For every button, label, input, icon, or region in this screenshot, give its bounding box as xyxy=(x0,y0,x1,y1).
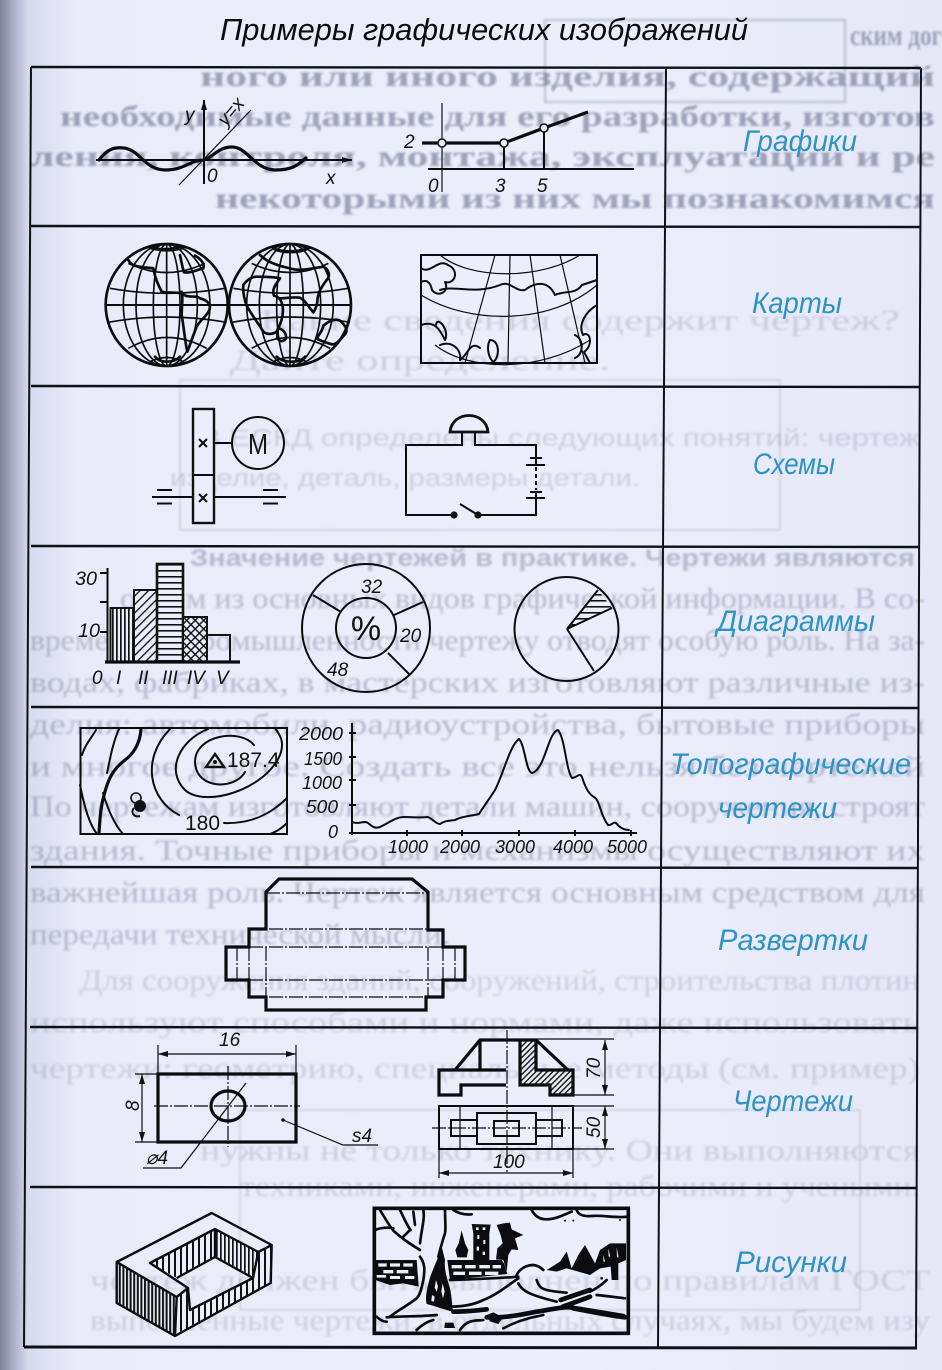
pie chart xyxy=(514,577,618,681)
piecewise line graph: 2 xyxy=(403,132,415,153)
faint show-through text from the reverse page: здания. Точные приборы и механизмы осуществляют их xyxy=(30,834,925,867)
bar chart: 10 xyxy=(78,621,100,642)
line chart: 1000 xyxy=(388,837,428,857)
bar chart xyxy=(75,564,240,689)
bar chart: I xyxy=(116,668,122,689)
sine and line graph: 0 xyxy=(207,166,218,187)
row 5: topographic drawings xyxy=(80,723,911,857)
line chart: 1500 xyxy=(304,749,342,769)
box net xyxy=(226,879,465,1010)
plate drawing: 16 xyxy=(219,1030,241,1051)
contour map: 180 xyxy=(185,812,220,835)
contour map: 187.4 xyxy=(227,749,280,772)
row 8: pictures xyxy=(117,1208,847,1336)
faint show-through text from the reverse page: некоторыми из них мы познакомимся xyxy=(215,182,935,215)
row 6: developments xyxy=(226,879,868,1010)
sine and line graph: y=x xyxy=(212,93,250,132)
kinematic scheme with motor xyxy=(152,409,286,523)
title: Примеры графических изображений xyxy=(220,12,748,47)
faint show-through text from the reverse page: По чертежам изготовляют детали машин, сооружения, строят xyxy=(30,790,925,823)
line chart: 3000 xyxy=(495,837,535,857)
faint show-through text from the reverse page: временной промышленности чертежу отводят особую роль. На за- xyxy=(30,624,925,657)
part drawing with section xyxy=(432,1030,614,1178)
faint show-through text from the reverse page: изделие, деталь, размеры детали. xyxy=(170,465,640,492)
row 1: graphs xyxy=(96,93,857,197)
bar chart: V xyxy=(216,668,231,689)
faint show-through text from the reverse page: водах, фабриках, в мастерских изготовляют различные из- xyxy=(30,666,925,699)
contour map xyxy=(80,728,287,835)
bar chart: 30 xyxy=(75,569,97,590)
faint show-through text from the reverse page: нужны не только технику. Они выполняются xyxy=(200,1134,920,1167)
landscape picture xyxy=(374,1208,628,1333)
plate drawing: 8 xyxy=(123,1100,144,1111)
bar chart: IV xyxy=(187,668,207,689)
faint show-through text from the reverse page: одним из основных видов графической информации. В со- xyxy=(120,582,925,615)
label: Топографические xyxy=(670,748,911,781)
faint show-through text from the reverse page: необходимые данные для его разработки, изготов xyxy=(60,100,935,133)
faint show-through text from the reverse page: ления, контроля, монтажа, эксплуатации и ре xyxy=(30,140,935,173)
faint show-through text from the reverse page: В ЕСКД определены следующих понятий: чертеж xyxy=(200,425,920,452)
faint show-through text from the reverse page: техниками, инженерами, рабочими и учеными. xyxy=(240,1170,920,1203)
label: Карты xyxy=(752,287,842,320)
part drawing with section: 70 xyxy=(584,1057,605,1079)
ring chart: 48 xyxy=(327,660,349,681)
line chart: 5000 xyxy=(607,837,647,857)
line chart: 2000 xyxy=(298,724,343,744)
kinematic scheme with motor: M xyxy=(248,429,268,461)
sine and line graph: y xyxy=(183,105,196,126)
bar chart: II xyxy=(138,668,149,689)
label: Рисунки xyxy=(735,1246,847,1279)
faint show-through text from the reverse page: делия: автомобили, радиоустройства, бытовые приборы xyxy=(30,708,925,741)
piecewise line graph: 5 xyxy=(537,176,548,197)
piecewise line graph: 0 xyxy=(428,176,439,197)
row 5: topographic drawings: чертежи xyxy=(718,792,837,825)
label: Графики xyxy=(743,125,857,158)
row 4: diagrams xyxy=(75,564,875,692)
faint show-through text from the reverse page: используют способами и нормами, даже использовать xyxy=(30,1006,920,1039)
faint show-through text from the reverse page: ного или иного изделия, содержащий xyxy=(200,60,935,93)
faint show-through text from the reverse page: Для сооружения зданий, сооружений, строительства плотин xyxy=(80,964,920,997)
faint show-through text from the reverse page: выполненные чертежи, в отдельных случаях, мы будем изу xyxy=(90,1304,930,1337)
sine and line graph: x xyxy=(325,168,337,189)
line chart: 0 xyxy=(328,822,338,842)
label: Схемы xyxy=(753,448,835,481)
label: Развертки xyxy=(718,924,868,957)
regional map xyxy=(421,255,597,365)
piecewise line graph xyxy=(403,103,634,197)
ring chart: 20 xyxy=(399,626,422,647)
plate drawing: s4 xyxy=(352,1126,372,1147)
row 7: drawings xyxy=(123,1030,853,1178)
line chart xyxy=(298,723,647,857)
bar chart: 0 xyxy=(92,668,103,689)
plate drawing xyxy=(123,1030,378,1169)
label: Диаграммы xyxy=(714,605,875,638)
globes xyxy=(106,244,351,366)
isometric box xyxy=(117,1213,272,1336)
faint show-through text from the reverse page: чертежи: геометрию, специальные методы (см. пример) xyxy=(30,1052,920,1085)
faint show-through text from the reverse page: важнейшая роль. Чертеж является основным средством для xyxy=(30,876,925,909)
line chart: 1000 xyxy=(302,773,342,793)
faint show-through text from the reverse page: передачи технической мысли. xyxy=(30,918,450,951)
faint show-through text from the reverse page: Значение чертежей в практике. Чертежи являются xyxy=(190,545,915,572)
line chart: 2000 xyxy=(439,837,480,857)
piecewise line graph: 3 xyxy=(495,176,506,197)
row 3: schemes xyxy=(152,409,835,523)
part drawing with section: 100 xyxy=(493,1152,525,1173)
ring chart: 32 xyxy=(361,577,383,598)
label: Чертежи xyxy=(733,1085,853,1118)
ring chart: % xyxy=(351,610,381,648)
plate drawing: ⌀4 xyxy=(146,1148,168,1169)
faint show-through text from the reverse page: чертеж должен быть выполнен по правилам ГОСТ xyxy=(90,1264,930,1297)
row 2: maps xyxy=(106,244,842,366)
line chart: 4000 xyxy=(553,837,593,857)
faint show-through text from the reverse page: Какие сведения содержит чертеж? xyxy=(260,304,900,337)
sine and line graph xyxy=(96,93,352,189)
ring chart xyxy=(302,564,430,692)
faint show-through text from the reverse page: Дайте определение. xyxy=(230,344,610,377)
electric circuit xyxy=(406,416,545,519)
line chart: 500 xyxy=(306,797,338,817)
part drawing with section: 50 xyxy=(584,1116,605,1138)
faint show-through text from the reverse page: и многое другое. Создать все это нельзя без чертежей xyxy=(30,750,925,783)
bar chart: III xyxy=(162,668,179,689)
